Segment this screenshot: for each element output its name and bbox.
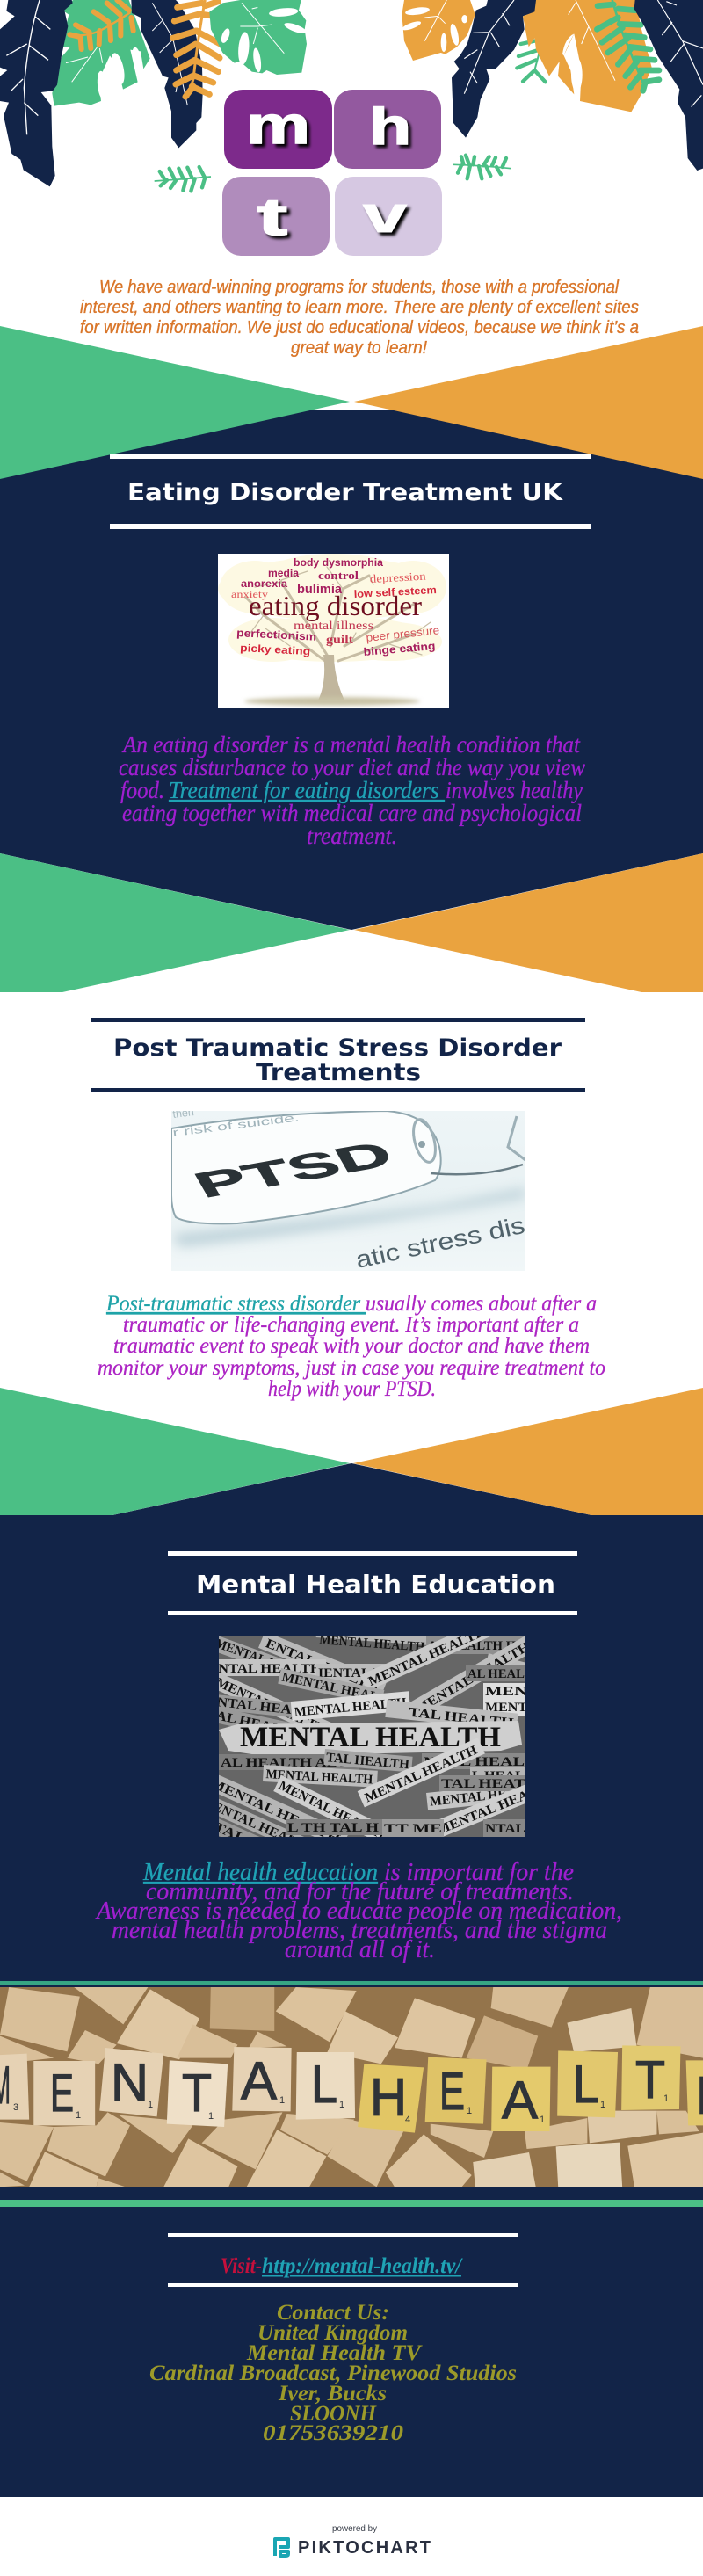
image: mental health paper strips: IENTAL H xyxy=(318,1666,384,1680)
image: mental health paper strips: NTAL HEA xyxy=(216,1695,293,1717)
green band below photo xyxy=(0,2200,703,2207)
image: eating disorder word tree xyxy=(218,554,449,708)
logo tile: v xyxy=(335,177,442,256)
tile score numbers: 1 xyxy=(663,2093,669,2104)
image: mental health paper strips: MEN xyxy=(485,1685,527,1699)
paragraph: mental health education xyxy=(95,1859,622,1963)
image: eating disorder word tree: guilt xyxy=(326,634,353,647)
tile letters xyxy=(0,2060,703,2119)
image: mental health paper strips: AL HEALT xyxy=(214,1709,291,1738)
paragraph: PTSD: Post-traumatic stress disorder xyxy=(105,1292,366,1316)
image: mental health paper strips: MENTAL HEA xyxy=(434,1789,531,1838)
image: eating disorder word tree: anorexia xyxy=(241,579,288,590)
logo tile: m: m xyxy=(246,96,310,155)
paragraph: eating disorder: involves healthy xyxy=(446,777,583,803)
logo tile: h xyxy=(334,90,441,169)
divider triangles: third pair xyxy=(0,1388,703,1515)
intro paragraph: We have award-winning programs for students, those with a professional xyxy=(99,278,620,297)
contact details: Iver, Bucks xyxy=(278,2382,387,2405)
paragraph: PTSD: traumatic event to speak with your doctor and have them xyxy=(113,1334,590,1358)
intro paragraph: for written information. We just do educational videos, because we think it’s a xyxy=(80,318,639,337)
paragraph: mental health education: is important for the xyxy=(384,1859,574,1886)
paragraph: PTSD: help with your PTSD. xyxy=(268,1377,436,1401)
visit link block: Visit- xyxy=(221,2254,262,2278)
heading: mental health education: Mental Health Education xyxy=(196,1570,555,1599)
tropical leaves: top right xyxy=(402,0,703,178)
image: mental health paper strips: TAL HEALTH xyxy=(408,1706,515,1731)
tile letters: A xyxy=(241,2051,277,2110)
image: eating disorder word tree: body dysmorphia xyxy=(294,558,384,569)
tile score numbers: 1 xyxy=(339,2100,344,2110)
image: mental health paper strips: MENTAL HEAL xyxy=(429,1785,525,1810)
logo tile: t xyxy=(222,177,330,256)
contact details: Cardinal Broadcast, Pinewood Studios xyxy=(149,2362,517,2385)
image: eating disorder word tree: bulimia xyxy=(297,583,343,597)
image: mental health paper strips: ENTAL HEALTH xyxy=(264,1636,381,1695)
heading: post traumatic stress disorder treatments xyxy=(91,1018,585,1092)
contact details: SLOONH xyxy=(290,2402,377,2426)
image: mental health paper strips: TAL HEA xyxy=(212,1820,285,1863)
image: PTSD glasses: r risk of suicide. xyxy=(172,1111,300,1139)
image: mental health paper strips: TAL HEALTH xyxy=(325,1751,410,1772)
intro paragraph xyxy=(80,278,639,358)
paragraph: mental health education: mental health problems, treatments, and the stigma xyxy=(112,1917,607,1944)
image: mental health paper strips: NTAL HEAL xyxy=(424,1755,525,1769)
tile score numbers xyxy=(14,2095,669,2122)
image: PTSD glasses: atic stress dis xyxy=(353,1212,527,1273)
paragraph: eating disorder xyxy=(119,731,585,849)
image: eating disorder word tree: eating disorder xyxy=(249,590,422,621)
image: mental health paper strips: L HEAL xyxy=(472,1769,525,1783)
tile score numbers: 1 xyxy=(467,2106,472,2116)
paragraph: PTSD: usually comes about after a xyxy=(366,1292,597,1316)
image: eating disorder word tree: peer pressure xyxy=(366,623,440,644)
image: PTSD glasses: PTSD xyxy=(186,1135,400,1205)
image: mental health paper strips: MENTAL HEALTH xyxy=(294,1696,407,1720)
tile score numbers: 1 xyxy=(600,2100,605,2110)
intro paragraph: great way to learn! xyxy=(291,338,427,358)
image: mental health paper strips: MENTAL HEALTH xyxy=(363,1743,480,1805)
tile letters: A xyxy=(502,2071,538,2130)
tile score numbers: 3 xyxy=(13,2102,18,2113)
divider triangles: second pair xyxy=(0,853,703,992)
footer: powered by piktochart xyxy=(275,2524,431,2558)
image: eating disorder word tree: anxiety xyxy=(231,588,268,600)
paragraph: mental health education: Mental health education xyxy=(142,1859,378,1886)
paragraph: PTSD: traumatic or life-changing event. It’s important after a xyxy=(123,1313,579,1337)
image: mental health paper strips: TT ME xyxy=(384,1822,442,1836)
image: mental health paper strips: MENTAL HEAL xyxy=(280,1671,380,1705)
image: mental health paper strips: HEAL xyxy=(487,1657,535,1681)
paragraph: mental health education: Awareness is needed to educate people on medication, xyxy=(95,1898,622,1925)
contact details: Contact Us: xyxy=(277,2301,389,2325)
image: mental health paper strips: MENTAL HEALTH xyxy=(319,1633,425,1655)
paragraph: PTSD xyxy=(98,1292,605,1401)
footer: powered by piktochart: PIKTOCHART xyxy=(298,2538,431,2558)
image: mental health paper strips: MENTAL HEALTH xyxy=(207,1776,342,1847)
contact details xyxy=(149,2301,517,2445)
loose wooden tiles xyxy=(0,1987,703,2187)
image: mental health paper strips: MENTAL HEALTH HEA xyxy=(366,1610,520,1689)
image: mental health paper strips: MENTAL HEALTH xyxy=(214,1676,328,1737)
image: eating disorder word tree: mental illness xyxy=(294,620,373,633)
tile letters: L xyxy=(573,2055,599,2114)
image: PTSD glasses xyxy=(171,1106,527,1273)
image: eating disorder word tree: perfectionism xyxy=(236,627,316,643)
paragraph: mental health education: community, and for the future of treatments. xyxy=(146,1878,574,1905)
tropical leaves: top left xyxy=(0,0,308,191)
logo tile: t: t xyxy=(257,187,287,246)
tile letters: H xyxy=(370,2068,407,2127)
contact details: United Kingdom xyxy=(257,2321,408,2345)
tile score numbers: 1 xyxy=(76,2110,81,2121)
image: eating disorder word tree: picky eating xyxy=(240,642,310,657)
letter tiles xyxy=(0,2045,703,2133)
intro paragraph: interest, and others wanting to learn more. There are plenty of excellent sites xyxy=(80,298,639,317)
tile score numbers: 4 xyxy=(405,2115,410,2125)
image: eating disorder word tree: control xyxy=(318,569,359,582)
image: mental health paper strips: MENTAL HEALTH xyxy=(213,1636,319,1687)
image: eating disorder word tree: depression xyxy=(369,570,427,585)
paragraph: eating disorder: treatment. xyxy=(307,823,397,849)
paragraph: eating disorder: An eating disorder is a mental health condition that xyxy=(121,731,581,758)
paragraph: mental health education: around all of it. xyxy=(285,1936,435,1963)
image: mental health paper strips: NTAL HEALTH xyxy=(218,1662,322,1676)
image: eating disorder word tree: binge eating xyxy=(363,640,436,658)
heading: mental health education xyxy=(168,1551,577,1615)
icon: piktochart logo xyxy=(275,2539,288,2556)
logo tile: m xyxy=(224,90,332,169)
tile score numbers: 1 xyxy=(148,2100,153,2110)
heading: eating disorder treatment xyxy=(110,454,591,529)
image: mental health paper strips: MENTAL HEALTH xyxy=(240,1722,501,1753)
tile letters: E xyxy=(439,2062,465,2121)
tile letters: T xyxy=(182,2064,212,2122)
image: scrabble tiles spelling mental health xyxy=(0,1987,703,2187)
image: mental health paper strips: MENTAL HEALTH xyxy=(265,1767,373,1788)
paragraph: eating disorder: food. xyxy=(120,777,164,803)
logo tile: h: h xyxy=(369,98,411,156)
visit link block xyxy=(168,2233,518,2287)
divider triangles: first pair xyxy=(0,326,703,479)
image: mental health paper strips: MENTAL HEALTH xyxy=(413,1640,533,1717)
footer: powered by piktochart: powered by xyxy=(332,2524,377,2534)
image: PTSD glasses: then xyxy=(172,1106,195,1121)
tile score numbers: 1 xyxy=(279,2095,285,2106)
image: mental health paper strips: L TH TAL H xyxy=(287,1821,379,1835)
image: mental health paper strips xyxy=(219,1636,525,1837)
visit link block: http://mental-health.tv/ xyxy=(262,2254,463,2278)
panel: mental health education navy background xyxy=(0,1463,703,2497)
heading: post traumatic stress disorder treatments: Treatments xyxy=(256,1059,421,1086)
image: mental health paper strips: MENTAL HEALTH xyxy=(276,1779,387,1842)
paragraph: eating disorder: Treatment for eating disorders xyxy=(169,777,445,803)
tile letters: E xyxy=(50,2064,74,2122)
image: mental health paper strips: NTAL xyxy=(485,1822,525,1836)
image: mental health paper strips: AL HEALTH AL H xyxy=(221,1756,352,1770)
heading: post traumatic stress disorder treatments: Post Traumatic Stress Disorder xyxy=(113,1034,562,1062)
image: mental health paper strips: AL HEAL xyxy=(467,1667,525,1681)
tile letters: N xyxy=(111,2053,149,2112)
logo tile: v: v xyxy=(363,186,407,243)
band above photo xyxy=(0,1981,703,1985)
paragraph: PTSD: monitor your symptoms, just in case you require treatment to xyxy=(98,1356,605,1380)
image: mental health paper strips: AL HEALTH HE xyxy=(428,1639,525,1653)
logo: mh tv tiles xyxy=(222,90,442,256)
tile letters: T xyxy=(635,2050,665,2109)
image: eating disorder word tree: media xyxy=(268,569,300,579)
image: eating disorder word tree: low self esteem xyxy=(353,584,437,600)
tile score numbers: 1 xyxy=(540,2115,545,2125)
panel: eating disorder navy background xyxy=(0,410,703,930)
tile letters: L xyxy=(311,2055,337,2114)
contact details: Mental Health TV xyxy=(246,2341,423,2365)
contact details: 01753639210 xyxy=(263,2421,404,2445)
tile score numbers: 1 xyxy=(208,2111,214,2122)
heading: eating disorder treatment: Eating Disorder Treatment UK xyxy=(127,479,563,506)
paragraph: eating disorder: causes disturbance to your diet and the way you view xyxy=(119,754,585,780)
image: mental health paper strips: ENTAL HEALTH xyxy=(211,1800,316,1857)
image: mental health paper strips: TAL HEAT xyxy=(441,1777,525,1791)
paragraph: eating disorder: eating together with medical care and psychological xyxy=(122,800,582,826)
image: mental health paper strips: MENT xyxy=(485,1701,527,1715)
